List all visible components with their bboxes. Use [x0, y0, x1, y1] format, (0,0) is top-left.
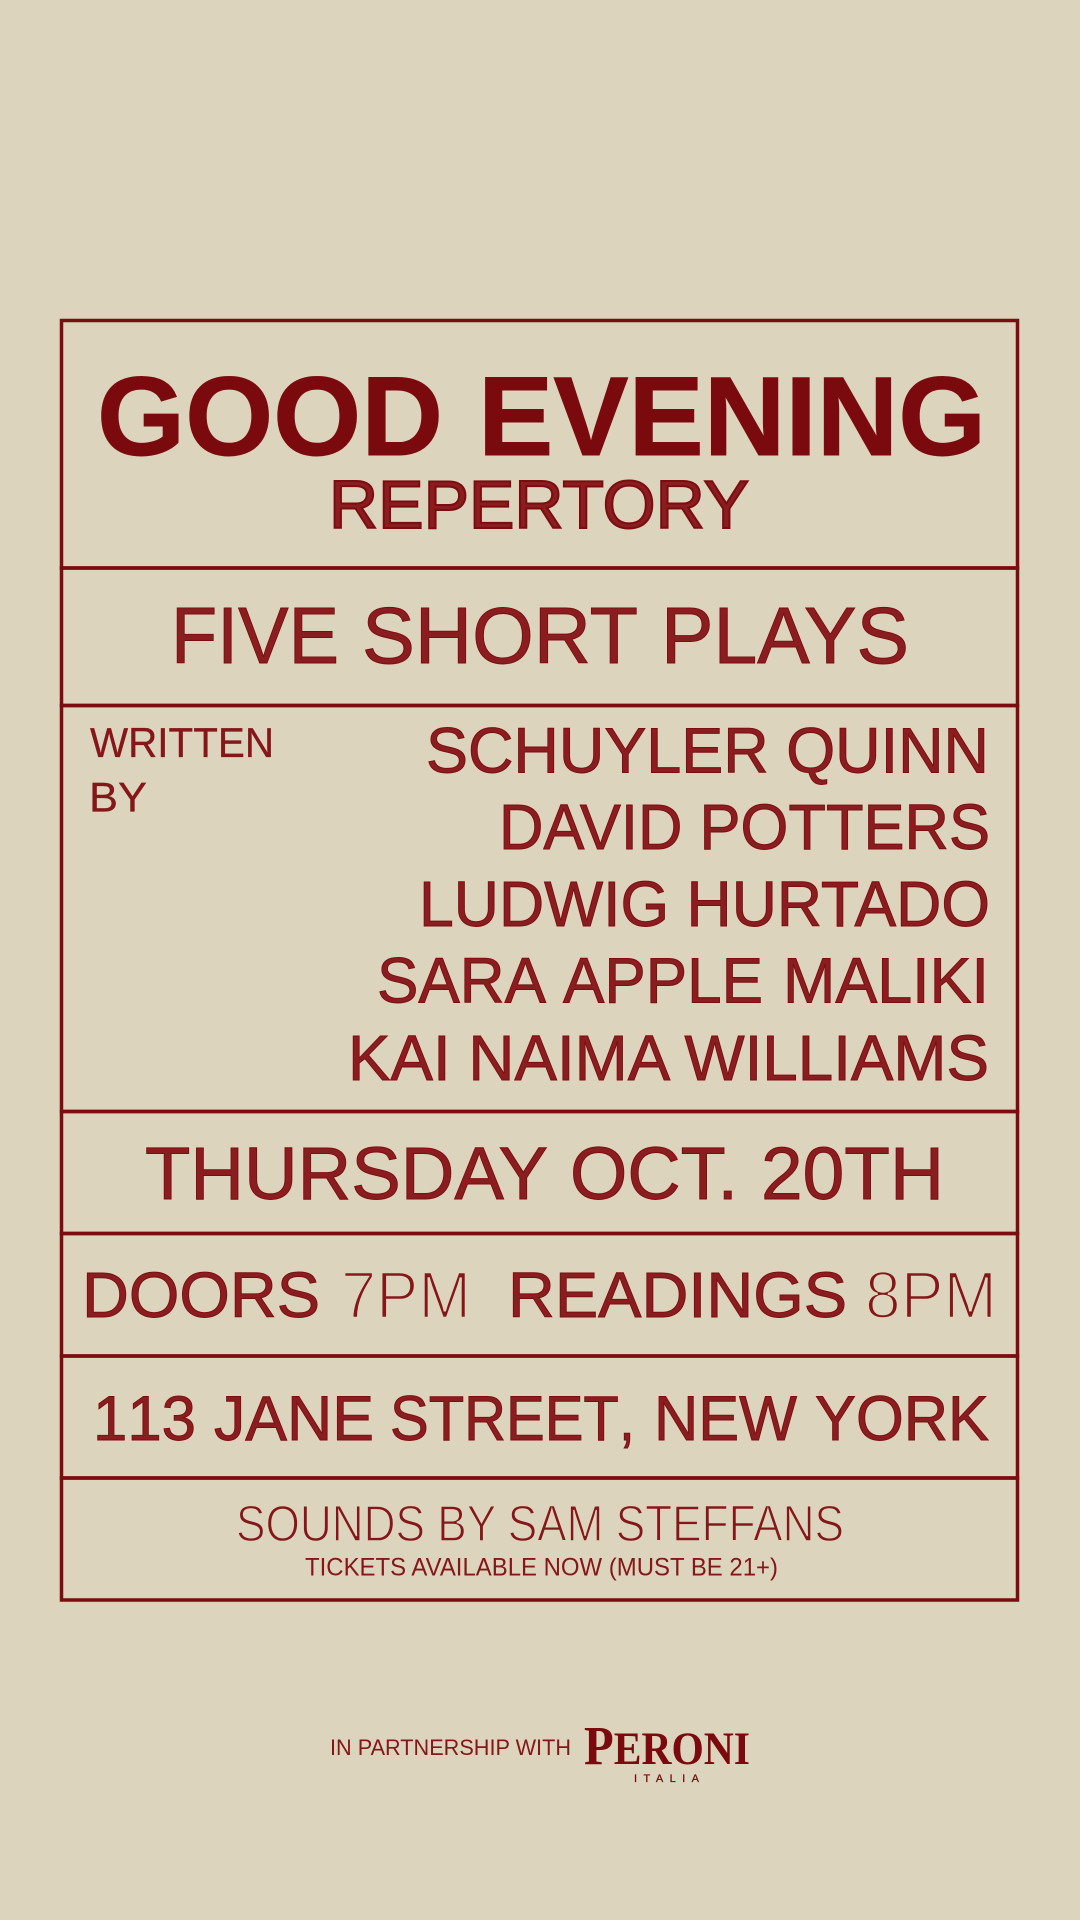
partnership line: [330, 1715, 750, 1785]
text: address: 113: [93, 1384, 196, 1454]
list: writer names: APPLE: [563, 944, 763, 1016]
list: writer names: SCHUYLER QUINN: [426, 714, 989, 786]
panel: title: [62, 320, 1018, 568]
text: times: DOORS: [82, 1259, 320, 1331]
list: writer names: LUDWIG HURTADO: [419, 868, 990, 940]
panel: five short plays: [62, 568, 1018, 706]
heading: five short plays: SHORT: [362, 591, 638, 680]
text: in partnership with: IN PARTNERSHIP WITH: [330, 1735, 571, 1760]
text: address: [93, 1384, 989, 1454]
heading: good evening: EVENING: [478, 354, 986, 479]
text: address: JANE: [214, 1384, 374, 1454]
text: sounds by: SOUNDS BY SAM STEFFANS: [236, 1495, 844, 1552]
text: tickets: TICKETS AVAILABLE NOW (MUST BE 21+): [305, 1554, 778, 1582]
label: written by: WRITTEN: [90, 719, 274, 766]
heading: five short plays: [171, 591, 909, 680]
panel: times: [62, 1234, 1018, 1356]
heading: five short plays: PLAYS: [661, 591, 909, 680]
list: writer names: [348, 714, 990, 1094]
text: times: [82, 1258, 997, 1333]
panel: date: [62, 1112, 1018, 1234]
text: address: YORK: [815, 1384, 989, 1454]
text: address: STREET,: [390, 1384, 635, 1454]
label: written by: BY: [89, 774, 147, 820]
text: date: OCT.: [570, 1132, 738, 1215]
list: writer names: MALIKI: [783, 944, 989, 1016]
list: writer names: KAI NAIMA WILLIAMS: [348, 1022, 989, 1094]
text: address: NEW: [654, 1384, 798, 1454]
text: date: THURSDAY: [145, 1132, 548, 1215]
list: writer names: DAVID POTTERS: [499, 791, 990, 863]
panel: writers: [62, 706, 1018, 1112]
label: written by: [89, 719, 274, 820]
text: times: 7PM: [341, 1258, 471, 1333]
heading: good evening: GOOD: [97, 354, 443, 479]
subheading: repertory: REPERTORY: [329, 467, 749, 543]
text: times: READINGS: [508, 1259, 847, 1331]
heading: good evening: [97, 354, 986, 479]
list: writer names: SARA: [377, 944, 546, 1016]
logo: peroni italia: PERONI: [584, 1715, 750, 1776]
heading: five short plays: FIVE: [171, 591, 339, 680]
text: date: 20TH: [761, 1132, 944, 1215]
text: times: 8PM: [865, 1258, 997, 1333]
logo: peroni italia: ITALIA: [634, 1773, 700, 1785]
panel: sounds and tickets: [62, 1478, 1018, 1600]
text: date: [145, 1132, 944, 1215]
panel: address: [62, 1356, 1018, 1478]
